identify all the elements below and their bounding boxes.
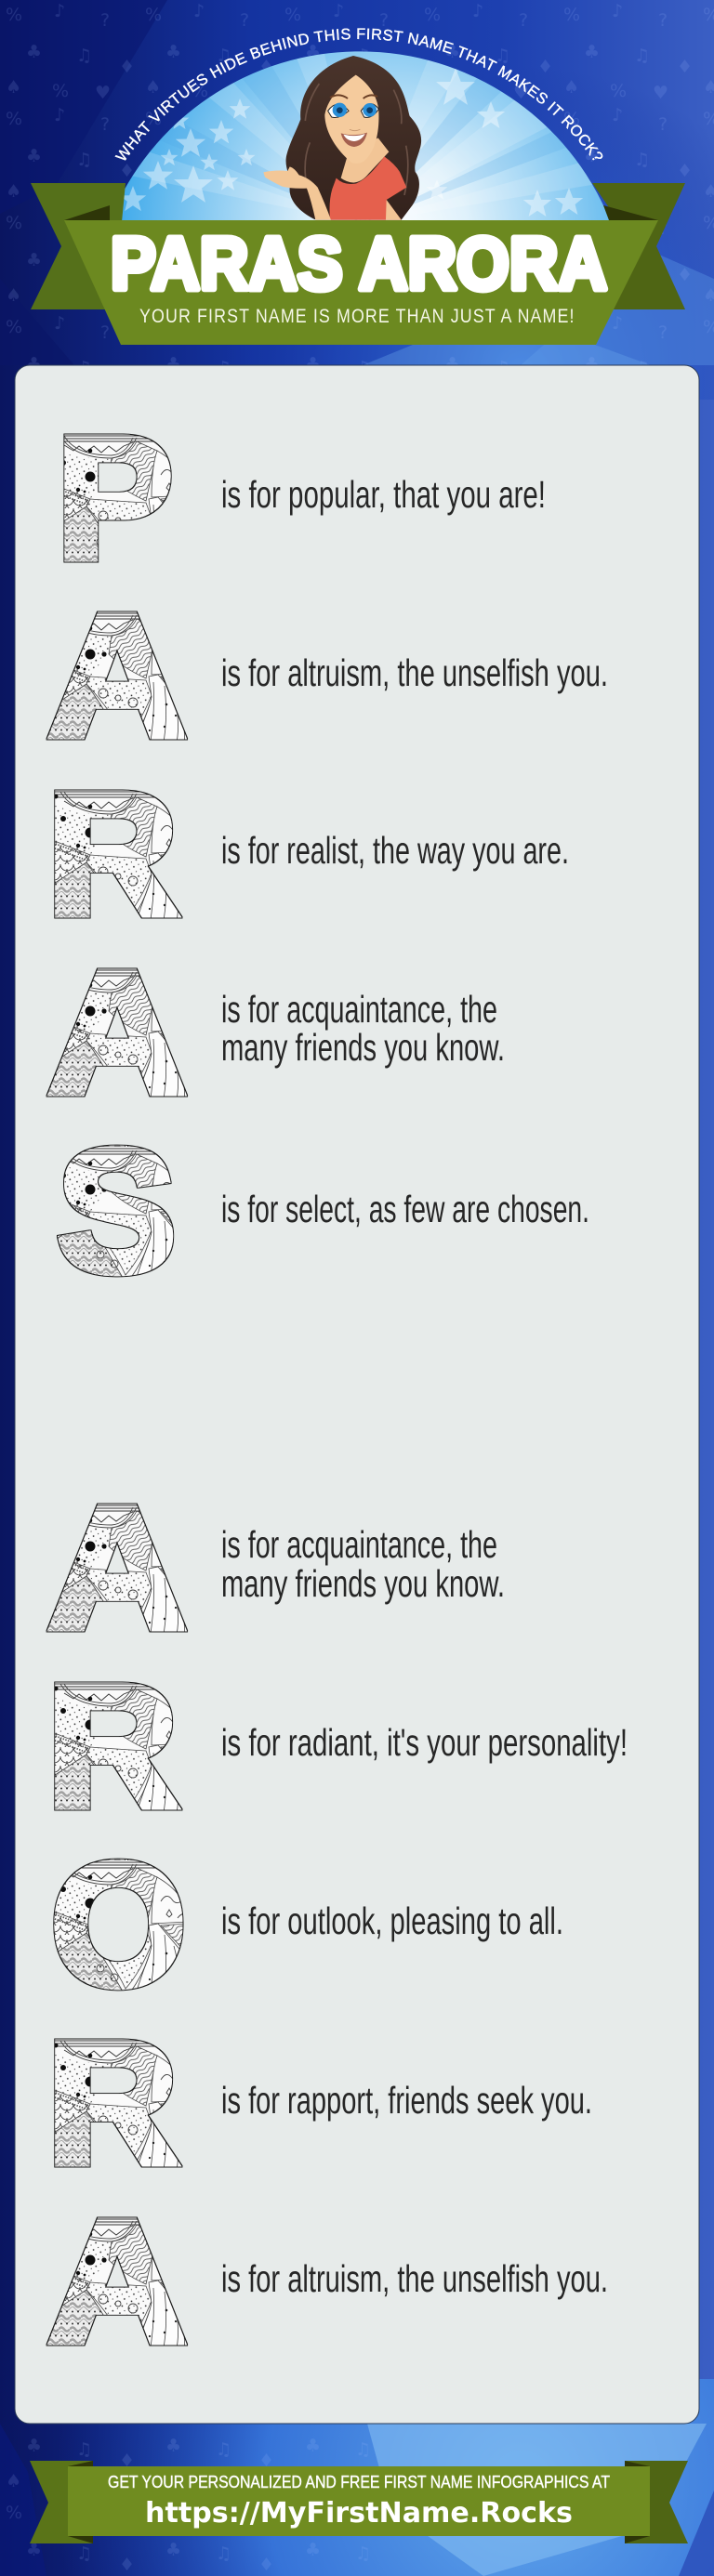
letter R: R <box>47 2007 178 2200</box>
text: is for popular, that you are! <box>221 473 546 516</box>
character: woman presenting <box>263 56 421 220</box>
letter A: A <box>48 580 186 772</box>
green title ribbon <box>31 183 685 345</box>
face <box>324 75 378 164</box>
ribbon front <box>64 220 658 345</box>
text: many friends you know. <box>221 1562 505 1605</box>
row: O <box>51 1829 563 2021</box>
row: R <box>47 2007 592 2200</box>
letter A: A <box>48 2186 186 2378</box>
text <box>221 1523 505 1605</box>
row: A <box>48 937 505 1129</box>
text: many friends you know. <box>221 1026 505 1069</box>
letter R: R <box>47 758 178 951</box>
right tail <box>625 2461 688 2543</box>
title: PARAS ARORA <box>111 222 607 305</box>
row: R <box>47 758 569 951</box>
hair <box>286 56 421 220</box>
text: is for acquaintance, the <box>221 988 497 1031</box>
footer url: https://MyFirstName.Rocks <box>145 2497 573 2530</box>
row: A <box>48 580 608 772</box>
footer ribbon <box>30 2461 688 2543</box>
row: A <box>48 1472 505 1664</box>
mouth <box>341 133 367 147</box>
row: S <box>58 1115 589 1308</box>
left tail <box>31 183 126 309</box>
letter A: A <box>48 937 186 1129</box>
arched tagline: WHAT VIRTUES HIDE BEHIND THIS FIRST NAME THAT MAKES IT ROCK? <box>115 28 602 161</box>
letter A: A <box>48 1472 186 1664</box>
letter S: S <box>58 1115 176 1308</box>
neck and chest <box>341 138 389 182</box>
letter P: P <box>57 402 173 595</box>
text: is for acquaintance, the <box>221 1523 497 1566</box>
right tail <box>592 183 685 309</box>
letter R: R <box>47 1650 178 1843</box>
letter O: O <box>51 1829 186 2021</box>
text: is for outlook, pleasing to all. <box>221 1899 563 1942</box>
subtitle: YOUR FIRST NAME IS MORE THAN JUST A NAME! <box>139 306 575 327</box>
arm and hand <box>263 166 331 220</box>
row: P <box>57 402 546 595</box>
main panel <box>15 365 699 2424</box>
eyes <box>328 95 378 117</box>
footer line one: GET YOUR PERSONALIZED AND FREE FIRST NAME INFOGRAPHICS AT <box>108 2472 610 2491</box>
row: A <box>48 2186 608 2378</box>
text: is for realist, the way you are. <box>221 829 569 872</box>
ribbon front <box>68 2466 650 2536</box>
shirt <box>330 156 406 220</box>
text <box>221 988 505 1069</box>
left tail <box>30 2461 93 2543</box>
row: R <box>47 1650 628 1843</box>
arch: starburst sky with stars <box>122 51 609 220</box>
